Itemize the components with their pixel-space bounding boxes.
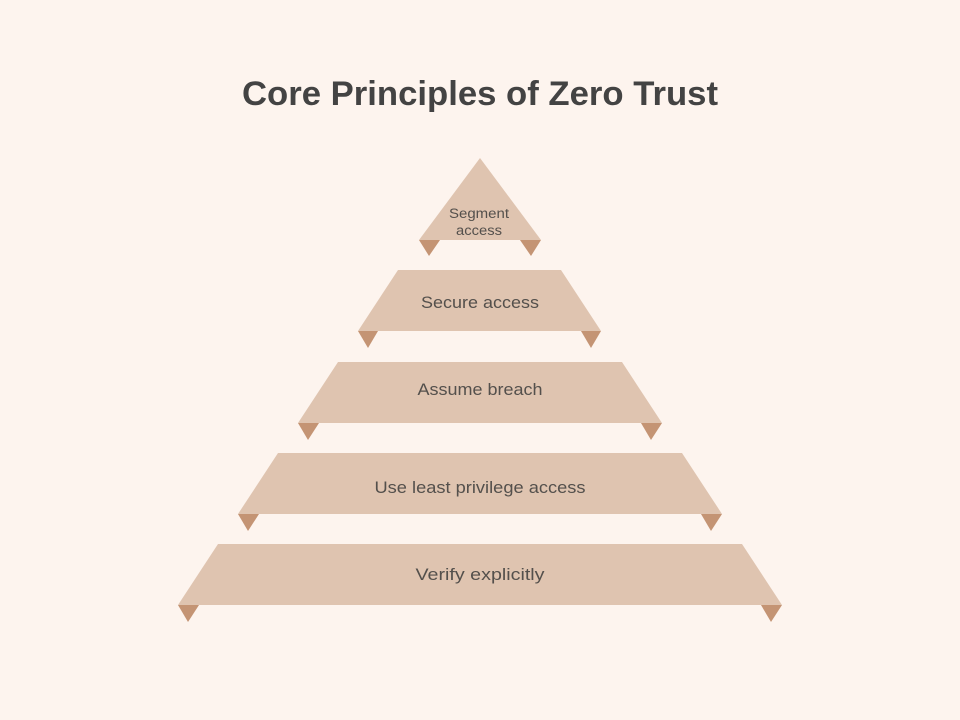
tier 2: Secure access: Secure access <box>421 294 539 312</box>
tier 1: Segment access <box>419 158 541 256</box>
title: Core Principles of Zero Trust <box>242 75 718 113</box>
tier 1: Segment access: Segment <box>449 206 509 221</box>
tier 4: Use least privilege access <box>238 453 722 531</box>
tier 3: Assume breach <box>298 362 662 440</box>
tier 5: Verify explicitly: Verify explicitly <box>416 566 545 584</box>
tier 2: Secure access <box>358 270 601 348</box>
tier 3: Assume breach: Assume breach <box>418 381 542 399</box>
tier 5: Verify explicitly <box>178 544 782 622</box>
tier 4: Use least privilege access: Use least privilege access <box>374 479 586 497</box>
tier 1: Segment access: access <box>456 223 502 238</box>
pyramid <box>178 158 782 622</box>
